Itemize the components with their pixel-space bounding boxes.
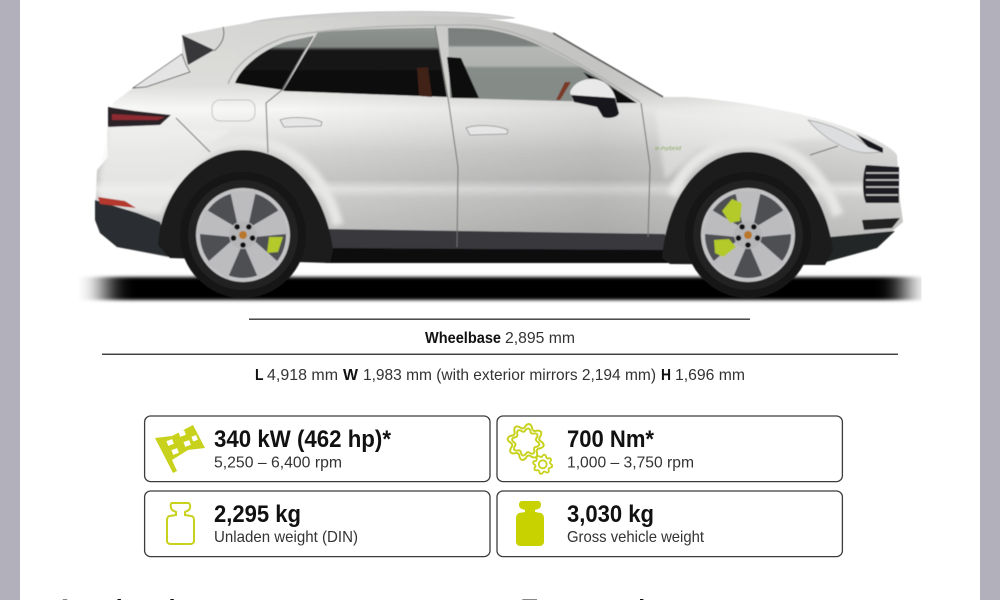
gross weight label: Gross vehicle weight <box>567 529 705 546</box>
power value: 340 kW (462 hp)* <box>214 426 392 453</box>
window frame chrome <box>228 25 640 102</box>
gross weight value: 3,030 kg <box>567 501 654 528</box>
icon: gears <box>508 424 552 474</box>
rear brake caliper <box>267 237 283 253</box>
overall dimensions text: W <box>343 367 359 384</box>
front wheel arch <box>662 152 833 265</box>
fuel flap <box>212 100 255 121</box>
panel: torque <box>497 416 842 482</box>
rear door window <box>283 28 447 97</box>
wheelbase rule <box>249 318 750 320</box>
wheelbase dimension text <box>425 330 575 347</box>
wheelbase dimension text: Wheelbase <box>425 330 501 347</box>
panel: gross weight <box>497 491 842 557</box>
rear reflector <box>98 197 136 208</box>
ground shadow <box>105 277 905 300</box>
unladen weight label: Unladen weight (DIN) <box>214 529 358 546</box>
icon: filled weight <box>516 501 544 546</box>
icon: outline weight <box>167 503 194 544</box>
torque rpm range: 1,000 – 3,750 rpm <box>567 454 694 472</box>
unladen weight value: 2,295 kg <box>214 501 301 528</box>
rear quarter window <box>235 36 313 90</box>
overall dimensions text: L <box>255 367 264 384</box>
overall dimensions text: 4,918 mm <box>267 367 338 384</box>
front lower bumper <box>826 231 895 262</box>
headlight <box>808 120 883 153</box>
torque value: 700 Nm* <box>567 426 655 453</box>
car body <box>95 16 903 257</box>
front fender highlight <box>655 110 850 180</box>
e-hybrid badge: e-hybrid <box>655 146 682 152</box>
overall dimensions text: 1,983 mm (with exterior mirrors 2,194 mm) <box>363 367 656 384</box>
rear hatch glass <box>133 54 190 88</box>
tail light <box>108 107 171 127</box>
wheel arch flares <box>176 140 838 225</box>
left side band <box>0 0 20 600</box>
interior seat tone <box>556 82 571 100</box>
power rpm range: 5,250 – 6,400 rpm <box>214 454 342 472</box>
front door window <box>448 28 637 103</box>
roof rail <box>247 11 515 24</box>
front brake caliper upper <box>722 199 742 223</box>
body tone overlay <box>95 16 903 257</box>
panel: power <box>145 416 490 482</box>
car illustration: side view <box>95 11 905 300</box>
overall length rule <box>102 354 898 355</box>
front brake caliper lower <box>714 239 736 257</box>
windscreen edge <box>553 33 663 97</box>
overall dimensions text: 1,696 mm <box>675 367 745 384</box>
side mirror <box>570 79 619 118</box>
overall dimensions text <box>255 367 745 384</box>
lower front vent <box>862 218 900 230</box>
panel: unladen weight <box>145 491 490 557</box>
overall dimensions text: H <box>661 367 671 384</box>
rear spoiler <box>182 35 214 65</box>
rear wheel arch <box>158 150 333 263</box>
rear wheel <box>180 172 306 298</box>
front door window dark lower edge <box>447 57 637 103</box>
door handles <box>280 118 322 127</box>
rear lower bumper <box>95 200 170 257</box>
front wheel <box>685 172 811 298</box>
front grille <box>863 165 900 203</box>
rear quarter highlight <box>100 125 230 215</box>
icon: chequered flag <box>155 425 205 473</box>
door cut lines <box>176 26 838 247</box>
wheelbase dimension text: 2,895 mm <box>505 330 575 347</box>
right side band <box>980 0 1000 600</box>
interior tone <box>417 67 432 97</box>
side sill <box>325 229 670 263</box>
